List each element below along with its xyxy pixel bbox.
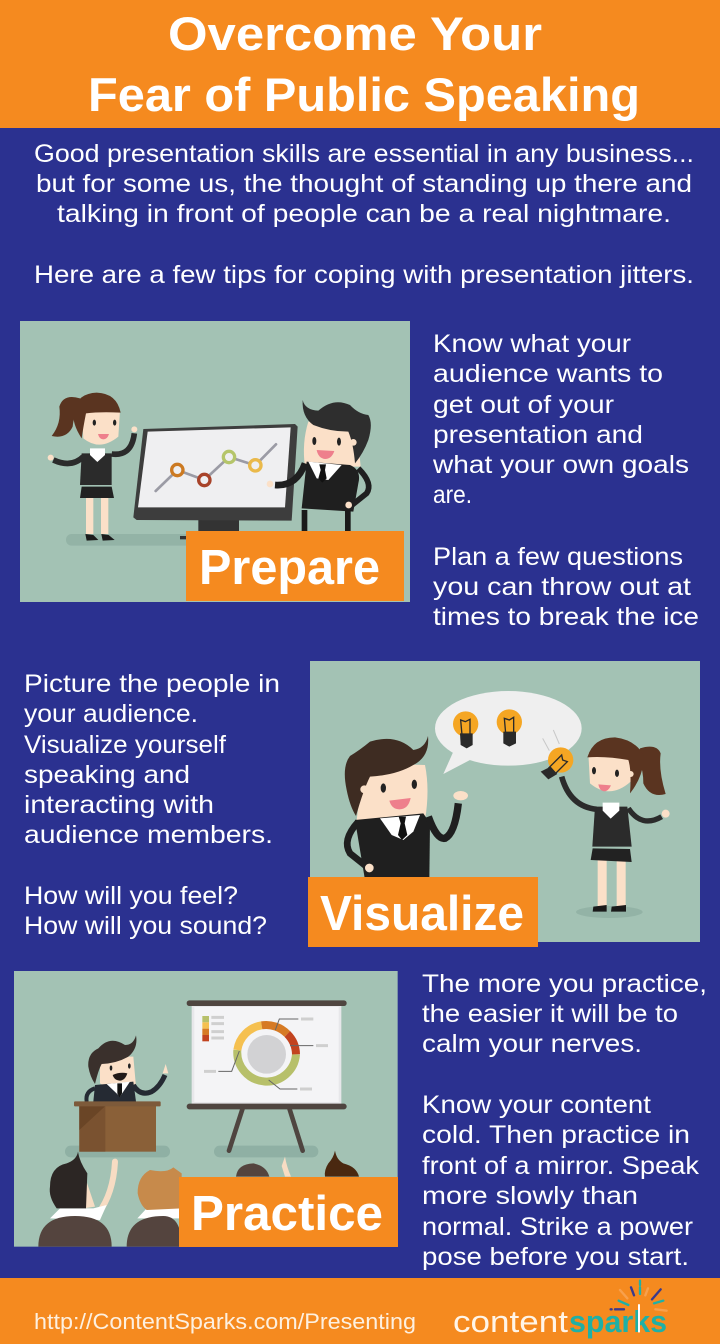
presentation board with donut chart	[187, 1000, 347, 1151]
text: practice tips: calm your nerves.	[422, 1030, 642, 1058]
text: practice tips: normal. Strike a power	[422, 1213, 693, 1241]
logo: contentsparks: sparks	[569, 1304, 667, 1339]
man presenter	[267, 400, 371, 533]
label: Practice: Practice	[191, 1187, 383, 1241]
text: practice tips: Know your content	[422, 1091, 651, 1119]
woman holding light bulb	[541, 737, 670, 912]
woman presenter	[48, 393, 137, 541]
intro text: but for some us, the thought of standing up there and	[36, 170, 692, 198]
text: practice tips: front of a mirror. Speak	[422, 1152, 700, 1180]
label: Practice	[179, 1177, 398, 1247]
text: practice tips	[422, 970, 707, 1271]
intro text: Here are a few tips for coping with presentation jitters.	[34, 261, 694, 289]
label: Visualize: Visualize	[320, 887, 524, 941]
logo: contentsparks: content	[453, 1304, 568, 1339]
man speaking	[345, 736, 468, 880]
text: visualize tips: your audience.	[24, 700, 198, 728]
text: practice tips: cold. Then practice in	[422, 1121, 690, 1149]
label: Prepare	[186, 531, 404, 601]
text: practice tips: pose before you start.	[422, 1243, 689, 1271]
text: prepare tips: times to break the ice	[433, 603, 699, 631]
text: visualize tips: speaking and	[24, 761, 190, 789]
intro text: Good presentation skills are essential in any business...	[34, 140, 694, 168]
text: practice tips: the easier it will be to	[422, 1000, 678, 1028]
label: Prepare: Prepare	[199, 541, 380, 595]
text: prepare tips: you can throw out at	[433, 573, 691, 601]
speaker at podium	[74, 1035, 168, 1152]
intro text	[34, 140, 694, 289]
speech bubble with light bulbs	[435, 691, 582, 774]
text: prepare tips: get out of your	[433, 391, 614, 419]
text: practice tips: more slowly than	[422, 1182, 638, 1210]
text: prepare tips	[432, 330, 699, 631]
intro text: talking in front of people can be a real nightmare.	[57, 200, 671, 228]
monitor with line chart	[133, 424, 298, 539]
header banner with title: Fear of Public Speaking	[88, 68, 640, 121]
footer URL: http://ContentSparks.com/Presenting	[34, 1309, 416, 1334]
text: visualize tips: interacting with	[24, 791, 214, 819]
header banner with title	[0, 0, 720, 128]
text: prepare tips: Plan a few questions	[433, 543, 683, 571]
panel: practice illustration	[14, 971, 398, 1247]
footer bar	[0, 1278, 720, 1344]
text: visualize tips: Visualize yourself	[24, 731, 226, 759]
audience members	[38, 1151, 359, 1247]
text: visualize tips	[24, 670, 280, 940]
text: visualize tips: How will you feel?	[24, 882, 238, 910]
text: visualize tips: Picture the people in	[24, 670, 280, 698]
text: prepare tips: what your own goals	[432, 451, 689, 479]
text: prepare tips: Know what your	[433, 330, 631, 358]
header banner with title: Overcome Your	[168, 7, 542, 60]
text: prepare tips: presentation and	[433, 421, 643, 449]
panel: prepare illustration	[20, 321, 410, 602]
text: visualize tips: audience members.	[24, 821, 273, 849]
logo: contentsparks	[453, 1281, 667, 1339]
text: prepare tips: are.	[433, 481, 472, 509]
text: visualize tips: How will you sound?	[24, 912, 267, 940]
panel: visualize illustration	[310, 661, 700, 942]
text: prepare tips: audience wants to	[433, 360, 663, 388]
text: practice tips: The more you practice,	[422, 970, 707, 998]
